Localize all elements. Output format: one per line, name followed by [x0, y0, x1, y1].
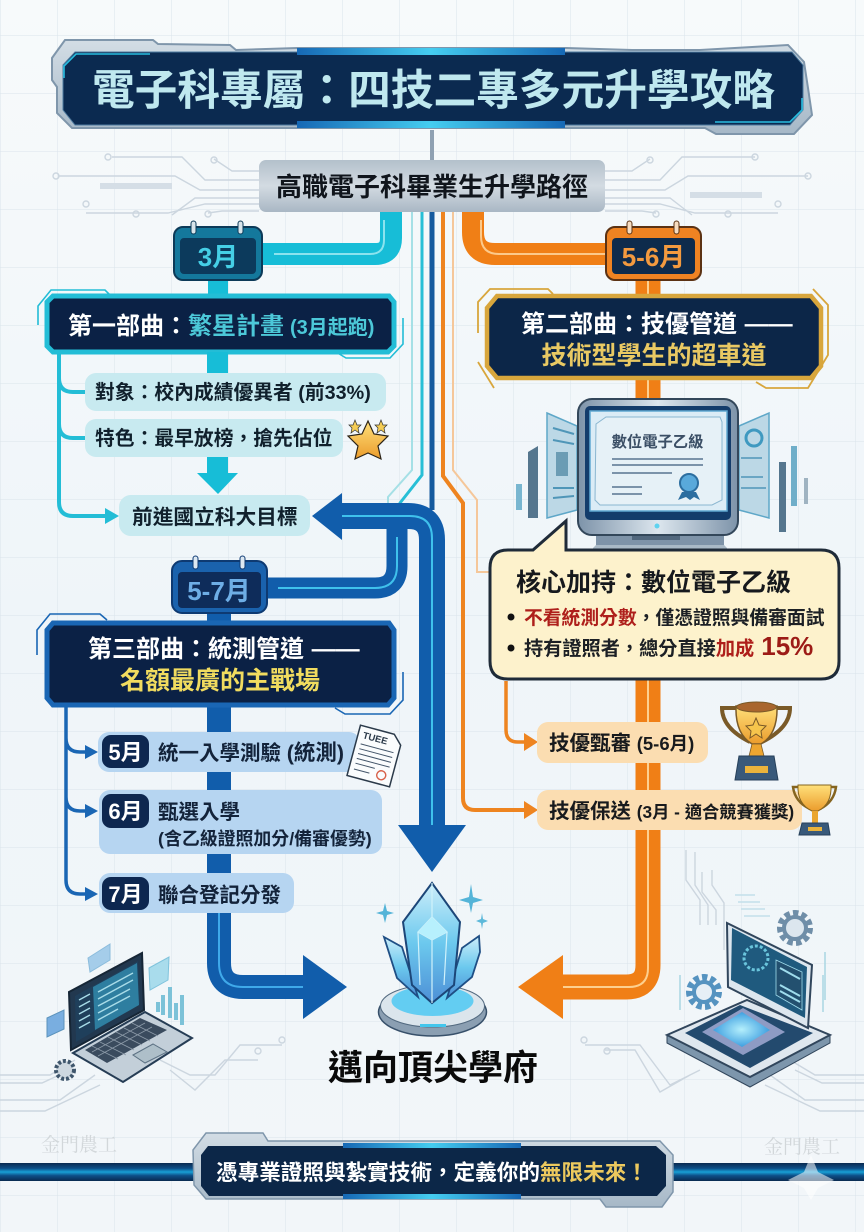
box: June selection: 6月 — [108, 799, 143, 824]
footer banner — [193, 1133, 673, 1207]
calendar badge: March — [174, 221, 262, 280]
icon: TUEE exam document: TUEE — [361, 730, 389, 748]
box: feature: 特色：最早放榜，搶先佔位 — [95, 427, 332, 450]
callout: core advantage — [490, 521, 839, 679]
sparkle mark — [788, 1155, 834, 1200]
box: July allocation: 聯合登記分發 — [158, 883, 281, 907]
box: May exam: 5月 — [108, 740, 143, 765]
connector: title to subtitle — [430, 130, 434, 162]
box: June selection: (含乙級證照加分/備審優勢) — [158, 828, 372, 849]
panel: second movement: 第二部曲：技優管道 —— — [521, 311, 793, 338]
icon: small trophy — [793, 785, 836, 835]
icon: crystal on pedestal — [376, 883, 488, 1036]
box: feature — [85, 419, 343, 457]
calendar badge: May to July: 5-7月 — [187, 576, 251, 606]
subtitle box — [259, 160, 605, 212]
panel: third movement — [37, 614, 403, 714]
decorative circuit traces: lower — [0, 850, 864, 1111]
box: target group: 對象：校內成績優異者 (前33%) — [95, 381, 371, 404]
panel: third movement: 第三部曲：統測管道 —— — [88, 636, 360, 663]
icon: monitor with certificate: 數位電子乙級 — [612, 433, 703, 451]
icon: star — [348, 420, 388, 459]
calendar badge: May to June: 5-6月 — [622, 242, 685, 272]
branch: callout to skills review — [506, 681, 538, 751]
calendar badge: May to July — [172, 556, 267, 613]
decorative circuit traces: header — [53, 154, 811, 217]
box: skills direct admission — [537, 790, 802, 830]
box: July allocation: 7月 — [108, 882, 143, 907]
calendar badge: March: 3月 — [198, 242, 238, 272]
panel: first movement — [38, 290, 403, 358]
callout: core advantage: 不看統測分數，僅憑證照與備審面試 — [524, 606, 825, 628]
panel: third movement: 名額最廣的主戰場 — [120, 667, 320, 695]
left branch with arrows — [66, 707, 98, 901]
footer banner: 憑專業證照與紮實技術，定義你的無限未來！ — [216, 1160, 648, 1185]
icon: large trophy — [722, 702, 790, 780]
callout: core advantage: 核心加持：數位電子乙級 — [516, 568, 791, 597]
box: national tech university goal — [119, 495, 310, 536]
box: May exam — [98, 732, 360, 772]
cyan path to March badge — [208, 211, 391, 298]
heading: title: 電子科專屬：四技二專多元升學攻略 — [92, 67, 775, 115]
box: May exam: 統一入學測驗 (統測) — [158, 741, 344, 765]
blue path to crystal — [219, 610, 347, 1019]
icon: monitor with certificate — [516, 399, 808, 552]
panel: first movement: 第一部曲：繁星計畫 (3月起跑) — [68, 313, 374, 340]
heading: toward top universities: 邁向頂尖學府 — [328, 1049, 538, 1088]
box: target group — [85, 373, 386, 411]
box: skills direct admission: 技優保送 (3月 - 適合競賽獲獎) — [549, 800, 794, 823]
orange main path — [473, 211, 648, 1019]
box: July allocation — [99, 873, 294, 913]
box: national tech university goal: 前進國立科大目標 — [132, 505, 298, 529]
box: June selection — [99, 790, 382, 854]
watermark left: 金門農工 — [41, 1134, 117, 1156]
box: June selection: 甄選入學 — [158, 801, 240, 824]
central thin lines — [388, 211, 538, 819]
cyan trunk and left branch — [59, 352, 228, 524]
title banner — [52, 40, 812, 134]
icon: TUEE exam document — [347, 725, 403, 787]
watermark right: 金門農工 — [764, 1136, 840, 1158]
panel: second movement: 技術型學生的超車道 — [541, 342, 767, 370]
panel: second movement — [478, 289, 828, 388]
box: skills review: 技優甄審 (5-6月) — [549, 732, 694, 755]
footer bars — [0, 1163, 864, 1181]
blue path to national university target — [262, 493, 466, 872]
calendar badge: May to June — [606, 221, 701, 280]
arrow: down to target — [197, 457, 238, 494]
callout: core advantage: 持有證照者，總分直接加成 15% — [524, 631, 813, 661]
box: skills review — [537, 722, 708, 763]
icon: laptop — [47, 944, 192, 1082]
subtitle box: 高職電子科畢業生升學路徑 — [276, 172, 588, 202]
icon: chip board with monitor and gears — [667, 914, 830, 1087]
